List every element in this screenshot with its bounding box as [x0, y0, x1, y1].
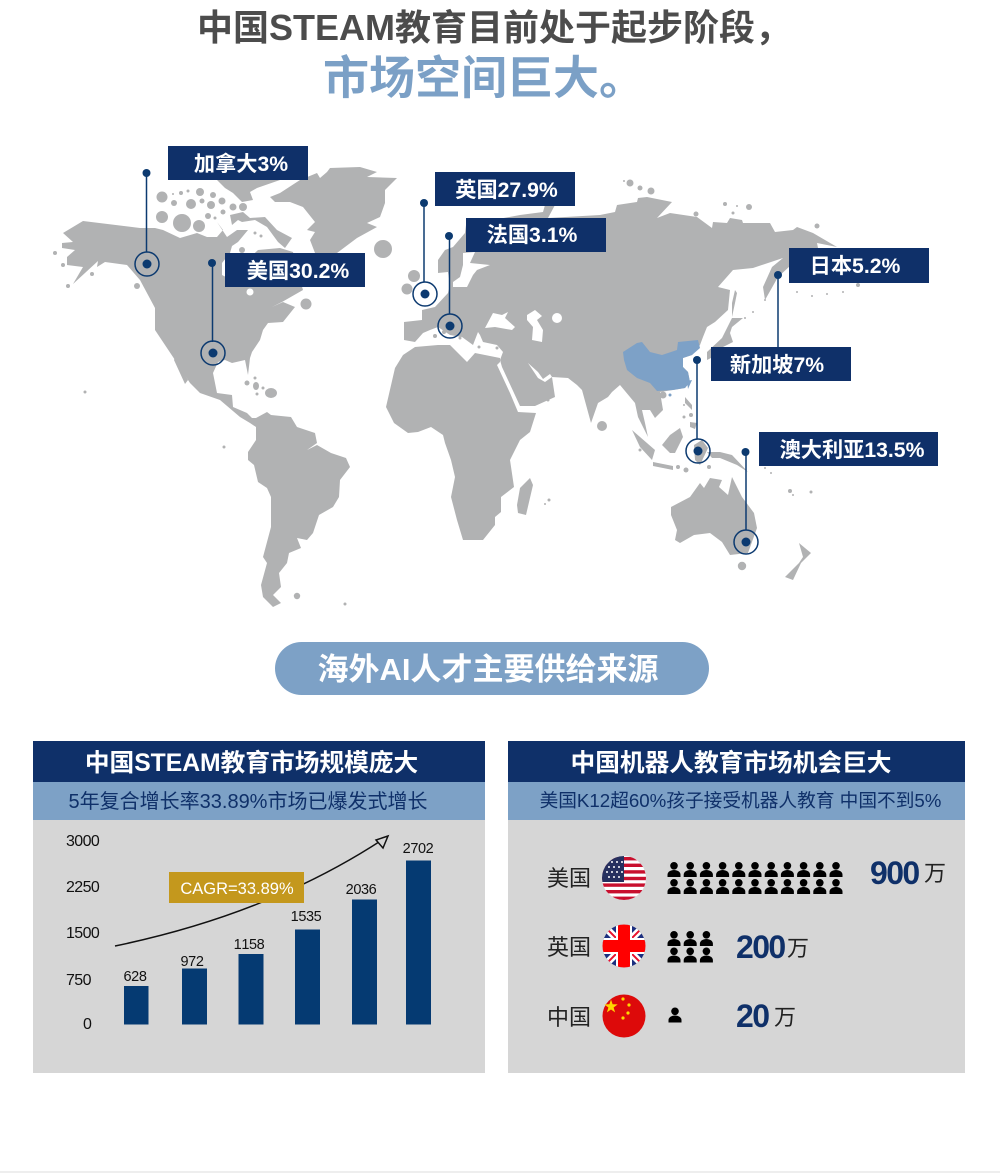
world map — [53, 167, 860, 607]
people: China — [668, 1008, 682, 1022]
row: USA: 美国 — [547, 866, 591, 891]
label: Canada — [168, 146, 308, 180]
panel header left: 中国STEAM教育市场规模庞大 — [85, 748, 418, 777]
pill heading: 海外AI人才主要供给来源 — [318, 652, 658, 687]
CAGR callout: CAGR=33.89% — [180, 880, 294, 898]
label: Singapore — [711, 347, 851, 381]
row: USA — [547, 855, 946, 900]
panel subheader right: 美国K12超60%孩子接受机器人教育 中国不到5% — [540, 790, 941, 811]
y axis: 750 — [66, 972, 92, 989]
bar chart — [124, 860, 431, 1024]
inland seas — [246, 252, 562, 382]
australia and new zealand — [671, 477, 757, 555]
bar values: 1535 — [291, 909, 322, 925]
panel header left — [33, 741, 485, 782]
label: USA — [225, 253, 365, 287]
icon: UK flag — [602, 924, 646, 968]
marker: Canada — [135, 169, 159, 276]
label: France — [466, 218, 606, 252]
label: USA: 美国30.2% — [247, 259, 349, 283]
row: UK — [547, 924, 809, 968]
pill heading — [275, 642, 709, 695]
label: Japan: 日本5.2% — [810, 254, 900, 278]
panel subheader right — [508, 782, 965, 820]
y axis: 3000 — [66, 833, 100, 850]
label: Australia — [759, 432, 938, 466]
icon: US flag — [602, 856, 646, 900]
people: USA — [668, 862, 842, 894]
title: 中国STEAM教育目前处于起步阶段， — [197, 7, 791, 48]
marker: Japan — [774, 271, 782, 348]
row: USA: 万 — [924, 861, 946, 886]
greenland — [270, 167, 397, 253]
marker: Singapore — [686, 356, 710, 463]
bar values: 628 — [124, 969, 147, 985]
bar values: 2036 — [346, 882, 377, 898]
row: UK: 200 — [736, 929, 785, 965]
southeast asia — [632, 430, 655, 460]
CAGR callout — [169, 872, 304, 903]
icon: China flag — [602, 994, 646, 1038]
africa — [386, 345, 536, 540]
americas — [62, 221, 350, 607]
label: UK — [435, 172, 575, 206]
row: UK: 英国 — [547, 935, 591, 960]
row: China: 20 — [736, 998, 769, 1034]
row: China — [547, 994, 796, 1038]
label: Singapore: 新加坡7% — [730, 353, 824, 377]
marker: USA — [201, 259, 225, 365]
row: UK: 万 — [787, 936, 809, 961]
y axis — [66, 833, 100, 1033]
label: Japan — [789, 248, 929, 283]
marker: Australia — [734, 448, 758, 554]
panel header right: 中国机器人教育市场机会巨大 — [571, 748, 891, 777]
islands — [53, 180, 860, 606]
row: USA: 900 — [870, 855, 919, 891]
panel: robot education — [508, 741, 965, 1073]
bar values: 972 — [180, 954, 204, 970]
eurasia — [404, 197, 837, 437]
panel header right — [508, 741, 965, 782]
y axis: 0 — [83, 1016, 92, 1033]
label: Canada: 加拿大3% — [194, 151, 288, 176]
label: UK: 英国27.9% — [455, 178, 558, 202]
bar values: 2702 — [403, 841, 434, 857]
bar values — [124, 841, 434, 985]
bar values: 1158 — [234, 937, 265, 953]
panel: STEAM market size — [33, 741, 485, 1073]
row: China: 中国 — [547, 1005, 591, 1030]
people: UK — [668, 931, 713, 962]
panel subheader left: 5年复合增长率33.89%市场已爆发式增长 — [69, 790, 427, 813]
y axis: 2250 — [66, 879, 100, 896]
marker: UK — [413, 199, 437, 306]
china highlight — [623, 340, 700, 396]
growth arrow — [115, 836, 388, 946]
label: Australia: 澳大利亚13.5% — [780, 438, 925, 462]
label: France: 法国3.1% — [487, 223, 577, 247]
panel subheader left — [33, 782, 485, 820]
title — [197, 7, 791, 104]
marker: France — [438, 232, 462, 338]
row: China: 万 — [774, 1005, 796, 1030]
canadian arctic — [217, 180, 280, 202]
y axis: 1500 — [66, 925, 100, 942]
title: 市场空间巨大。 — [323, 52, 645, 104]
japan and sakhalin — [707, 318, 743, 360]
